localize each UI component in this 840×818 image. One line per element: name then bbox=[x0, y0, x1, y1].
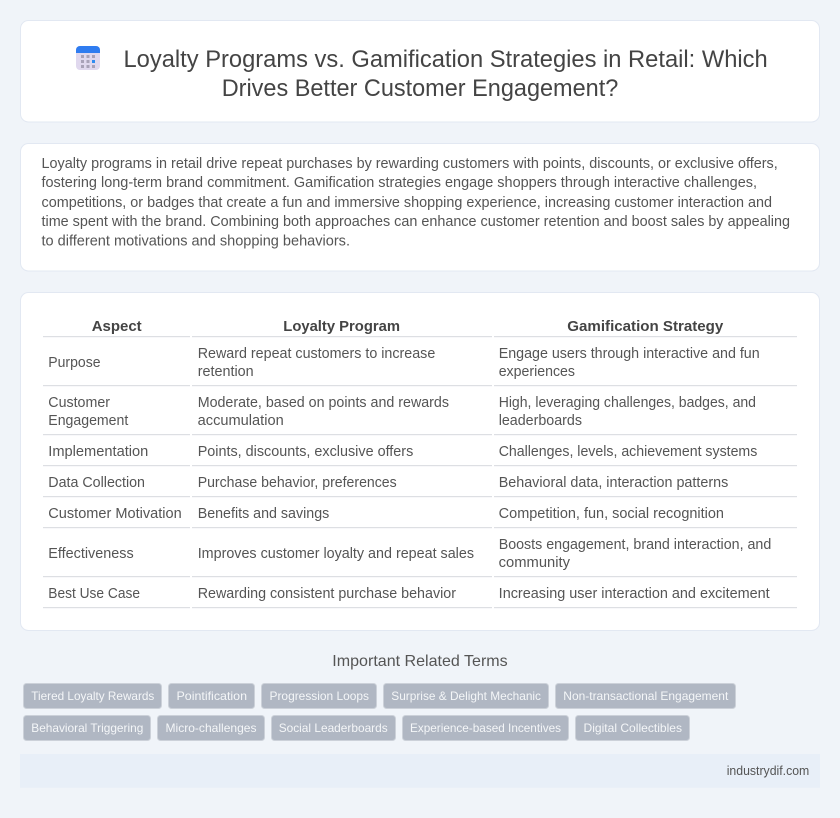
table header row: Aspect bbox=[92, 318, 142, 335]
tag: micro-challenges: Micro-challenges bbox=[166, 721, 256, 735]
row: purpose: Reward repeat customers to increase bbox=[198, 346, 435, 362]
summary paragraph: time spent with the brand. Combining both approaches can enhance customer retention and boost sales by appealing bbox=[42, 214, 790, 230]
row: implementation: Points, discounts, exclusive offers bbox=[198, 444, 413, 460]
tag: digital collectibles: Digital Collectibles bbox=[584, 721, 682, 735]
footer bar bbox=[20, 754, 820, 788]
tag: non-transactional engagement bbox=[556, 684, 736, 708]
tag: digital collectibles bbox=[576, 716, 690, 740]
tag: behavioral triggering: Behavioral Triggering bbox=[31, 721, 143, 735]
title bbox=[124, 46, 768, 102]
footer bar: industrydif.com bbox=[727, 764, 809, 778]
tag: social leaderboards: Social Leaderboards bbox=[279, 721, 388, 735]
title: Loyalty Programs vs. Gamification Strategies in Retail: Which bbox=[124, 46, 768, 73]
table header row: Loyalty Program bbox=[283, 318, 400, 335]
tag: pointification: Pointification bbox=[176, 689, 247, 703]
heading: important related terms: Important Related Terms bbox=[332, 653, 508, 670]
tag: non-transactional engagement: Non-transactional Engagement bbox=[563, 689, 729, 703]
title: Drives Better Customer Engagement? bbox=[222, 75, 618, 102]
summary paragraph: to different motivations and shopping behaviors. bbox=[42, 234, 350, 250]
row: effectiveness: Boosts engagement, brand interaction, and bbox=[499, 537, 771, 553]
row: purpose bbox=[43, 346, 797, 386]
summary paragraph: competitions, or badges that create a fun and immersive shopping experience, increasing customer interaction and bbox=[42, 195, 772, 211]
row: data collection: Purchase behavior, preferences bbox=[198, 475, 397, 491]
row: best use case bbox=[43, 586, 797, 608]
tag: progression loops: Progression Loops bbox=[270, 689, 369, 703]
tag: surprise and delight mechanic: Surprise & Delight Mechanic bbox=[391, 689, 541, 703]
summary paragraph: Loyalty programs in retail drive repeat purchases by rewarding customers with points, discounts, or exclusive offers, bbox=[42, 156, 778, 172]
row: customer motivation: Customer Motivation bbox=[48, 506, 182, 522]
row: effectiveness: Improves customer loyalty and repeat sales bbox=[198, 546, 474, 562]
row: customer engagement: Moderate, based on points and rewards bbox=[198, 395, 449, 411]
row: data collection: Data Collection bbox=[48, 475, 145, 491]
icon: calendar bbox=[76, 46, 100, 70]
table header row: Gamification Strategy bbox=[567, 318, 724, 335]
row: customer motivation: Benefits and savings bbox=[198, 506, 329, 522]
panel: header bbox=[20, 20, 820, 122]
tag: tiered loyalty rewards bbox=[24, 684, 162, 708]
row: effectiveness bbox=[43, 537, 797, 577]
table header row bbox=[43, 318, 797, 337]
row: customer engagement: leaderboards bbox=[499, 413, 582, 429]
row: customer engagement bbox=[43, 395, 797, 435]
row: customer engagement: Engagement bbox=[48, 413, 128, 429]
summary paragraph bbox=[42, 156, 790, 250]
row: customer motivation: Competition, fun, social recognition bbox=[499, 506, 724, 522]
row: best use case: Rewarding consistent purchase behavior bbox=[198, 586, 456, 602]
row: customer engagement: accumulation bbox=[198, 413, 284, 429]
row: effectiveness: community bbox=[499, 555, 571, 571]
row: customer engagement: High, leveraging challenges, badges, and bbox=[499, 395, 756, 411]
row: purpose: retention bbox=[198, 364, 254, 380]
tag: social leaderboards bbox=[272, 716, 396, 740]
row: best use case: Increasing user interaction and excitement bbox=[499, 586, 770, 602]
row: customer motivation bbox=[43, 506, 797, 528]
row: purpose: experiences bbox=[499, 364, 575, 380]
panel: comparison table bbox=[20, 292, 820, 630]
tag: tiered loyalty rewards: Tiered Loyalty Rewards bbox=[31, 689, 154, 703]
tag: experience-based incentives: Experience-based Incentives bbox=[410, 721, 561, 735]
tag: micro-challenges bbox=[158, 716, 264, 740]
row: data collection bbox=[43, 475, 797, 497]
panel: summary text bbox=[20, 144, 820, 271]
tag: experience-based incentives bbox=[402, 716, 568, 740]
row: customer engagement: Customer bbox=[48, 395, 110, 411]
row: best use case: Best Use Case bbox=[48, 586, 140, 602]
row: data collection: Behavioral data, interaction patterns bbox=[499, 475, 728, 491]
summary paragraph: fostering long-term brand commitment. Gamification strategies engage shoppers through interactive challenges, bbox=[42, 175, 757, 191]
tag: progression loops bbox=[262, 684, 376, 708]
row: implementation bbox=[43, 444, 797, 466]
row: implementation: Implementation bbox=[48, 444, 148, 460]
row: implementation: Challenges, levels, achievement systems bbox=[499, 444, 757, 460]
tag: behavioral triggering bbox=[24, 716, 150, 740]
tag: surprise and delight mechanic bbox=[384, 684, 548, 708]
row: purpose: Purpose bbox=[48, 355, 100, 371]
row: purpose: Engage users through interactive and fun bbox=[499, 346, 760, 362]
panel: related term tags bbox=[24, 684, 736, 740]
row: effectiveness: Effectiveness bbox=[48, 546, 134, 562]
tag: pointification bbox=[168, 684, 254, 708]
